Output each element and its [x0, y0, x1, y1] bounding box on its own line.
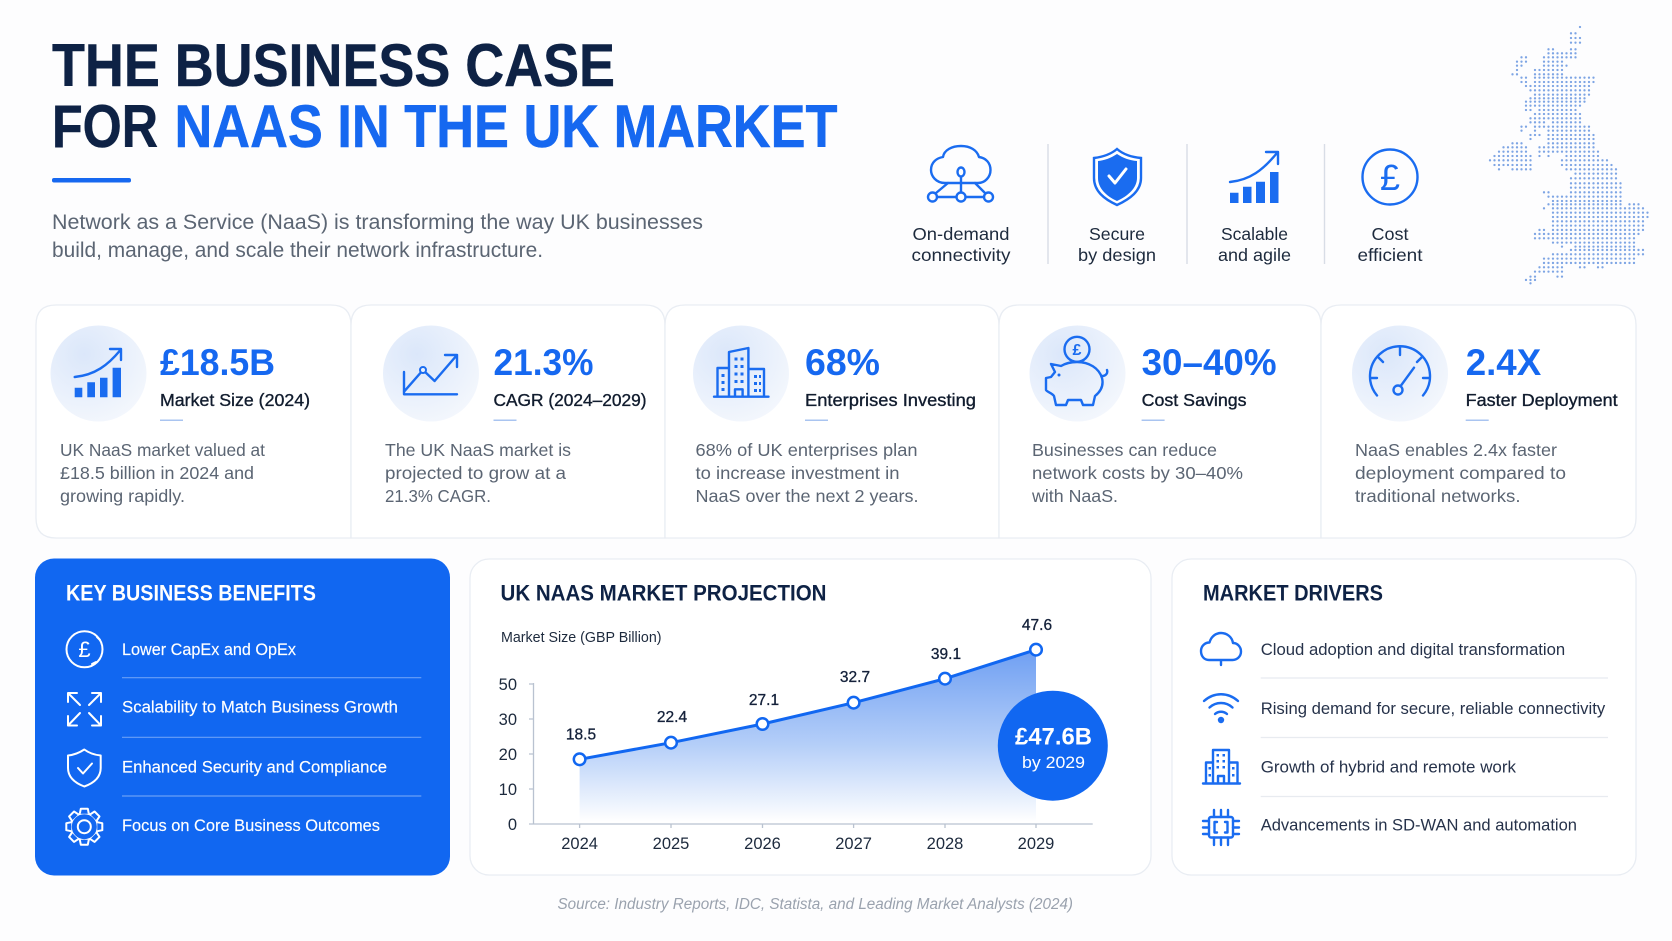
heading: market drivers: MARKET DRIVERS [1203, 581, 1383, 606]
feature: secure by design: Secure [1089, 224, 1145, 244]
card: enterprises investing: to increase investment in [696, 463, 900, 483]
card: CAGR: CAGR (2024–2029) [494, 390, 646, 410]
card: market size [36, 305, 351, 538]
card: CAGR: 21.3% [494, 342, 594, 383]
card: cost savings: 30–40% [1142, 342, 1277, 383]
card: CAGR: The UK NaaS market is [385, 440, 571, 460]
feature: secure by design: by design [1078, 245, 1156, 265]
chart axes: 30 [499, 711, 517, 729]
title accent rule [52, 178, 131, 182]
title: FOR [52, 93, 158, 160]
driver: connectivity wifi [1204, 694, 1606, 723]
feature icons row [912, 144, 1423, 265]
data labels: 39.1 [931, 646, 961, 663]
y axis title: Market Size (GBP Billion) [501, 629, 662, 646]
chart axes: 0 [508, 816, 517, 834]
card: cost savings: with NaaS. [1031, 486, 1118, 506]
icon: line trend [383, 326, 479, 422]
card: faster deployment: 2.4X [1466, 342, 1542, 383]
benefit: security [68, 750, 387, 786]
callout: 47.6B by 2029: by 2029 [1022, 753, 1085, 772]
intro text [52, 210, 703, 262]
card: cost savings [999, 305, 1321, 538]
chart axes: 10 [499, 781, 517, 799]
feature: on-demand connectivity: On-demand [912, 224, 1010, 244]
chart axes [499, 676, 1093, 853]
KPI cards [36, 305, 1636, 538]
card: faster deployment: traditional networks. [1355, 486, 1520, 506]
title: NAAS IN THE UK MARKET [174, 93, 838, 160]
feature: scalable and agile: Scalable [1221, 224, 1288, 244]
driver: hybrid work building [1203, 750, 1516, 784]
driver: cloud adoption [1201, 633, 1565, 665]
card: market size: growing rapidly. [60, 486, 185, 506]
card: market size: £18.5 billion in 2024 and [60, 463, 254, 483]
callout: 47.6B by 2029 [998, 691, 1108, 801]
chart axes: 2027 [835, 835, 872, 853]
panel: market projection chart [470, 559, 1151, 875]
heading: key business benefits: KEY BUSINESS BENEFITS [66, 581, 316, 606]
feature: cost efficient [1358, 150, 1423, 265]
feature: scalable and agile [1218, 152, 1291, 265]
benefit: core outcomes [66, 809, 380, 845]
chart axes: 2026 [744, 835, 781, 853]
benefit: core outcomes: Focus on Core Business Outcomes [122, 816, 380, 835]
benefit: lower capex and opex [66, 631, 296, 667]
dotted UK map [1490, 27, 1648, 283]
feature: secure by design [1078, 149, 1156, 265]
card: enterprises investing: NaaS over the next 2 years. [696, 486, 918, 506]
intro text: Network as a Service (NaaS) is transforming the way UK businesses [52, 210, 703, 234]
card: market size: Market Size (2024) [160, 390, 310, 410]
benefit: lower capex and opex: Lower CapEx and OpEx [122, 640, 296, 659]
card: enterprises investing [665, 305, 999, 538]
card: enterprises investing: Enterprises Investing [805, 390, 976, 410]
icon: growth bars [50, 326, 146, 422]
card: enterprises investing: 68% of UK enterprises plan [696, 440, 918, 460]
icon: office buildings [693, 326, 789, 422]
card: market size: £18.5B [160, 342, 275, 383]
chart axes: 50 [499, 676, 517, 694]
panel: key business benefits [35, 558, 450, 876]
feature: on-demand connectivity [912, 146, 1011, 265]
benefit: lower capex and opex: £ [78, 637, 91, 662]
data labels: 18.5 [566, 726, 596, 744]
feature: scalable and agile: and agile [1218, 245, 1291, 265]
benefit: security: Enhanced Security and Compliance [122, 758, 387, 777]
driver: connectivity wifi: Rising demand for secure, reliable connectivity [1261, 699, 1606, 718]
card: faster deployment: deployment compared to [1355, 463, 1566, 483]
card: faster deployment: Faster Deployment [1466, 390, 1618, 410]
driver: SD-WAN chip: Advancements in SD-WAN and automation [1261, 815, 1577, 834]
feature: cost efficient: efficient [1358, 245, 1423, 265]
callout: 47.6B by 2029: £47.6B [1015, 724, 1092, 750]
feature: cost efficient: £ [1380, 157, 1400, 198]
data labels [566, 617, 1052, 744]
benefit: scalability: Scalability to Match Business Growth [122, 698, 398, 717]
card: market size: UK NaaS market valued at [60, 440, 265, 460]
card: cost savings: network costs by 30–40% [1032, 463, 1243, 483]
card: faster deployment [1321, 305, 1636, 538]
title [52, 32, 838, 160]
source note: Source: Industry Reports, IDC, Statista, and Leading Market Analysts (2024) [558, 896, 1073, 913]
area and line series [574, 644, 1042, 822]
chart axes: 2025 [653, 835, 689, 853]
intro text: build, manage, and scale their network infrastructure. [52, 238, 543, 262]
benefit: scalability [68, 693, 398, 726]
chart axes: 20 [499, 746, 517, 764]
feature: cost efficient: Cost [1372, 224, 1409, 244]
title: THE BUSINESS CASE [52, 32, 615, 99]
card: cost savings: Businesses can reduce [1032, 440, 1217, 460]
driver: cloud adoption: Cloud adoption and digital transformation [1261, 640, 1565, 659]
heading: market projection: UK NAAS MARKET PROJECTION [500, 581, 826, 606]
feature: on-demand connectivity: connectivity [912, 245, 1011, 265]
icon: piggy bank [1030, 326, 1126, 422]
icon: speedometer [1352, 326, 1448, 422]
chart axes: 2024 [561, 835, 598, 853]
data labels: 27.1 [749, 692, 779, 709]
card: cost savings: Cost Savings [1142, 390, 1247, 410]
card: CAGR [351, 305, 665, 538]
driver: SD-WAN chip [1203, 810, 1577, 845]
icon: piggy bank: £ [1073, 342, 1082, 359]
chart axes: 2029 [1018, 835, 1054, 853]
panel: market drivers [1172, 559, 1636, 875]
card: CAGR: projected to grow at a [385, 463, 566, 483]
card: CAGR: 21.3% CAGR. [385, 486, 491, 506]
driver: hybrid work building: Growth of hybrid and remote work [1261, 757, 1516, 776]
data labels: 47.6 [1022, 617, 1052, 634]
card: faster deployment: NaaS enables 2.4x faster [1355, 440, 1557, 460]
card: enterprises investing: 68% [805, 342, 880, 383]
chart axes: 2028 [927, 835, 963, 853]
data labels: 22.4 [657, 709, 687, 726]
data labels: 32.7 [840, 669, 870, 686]
